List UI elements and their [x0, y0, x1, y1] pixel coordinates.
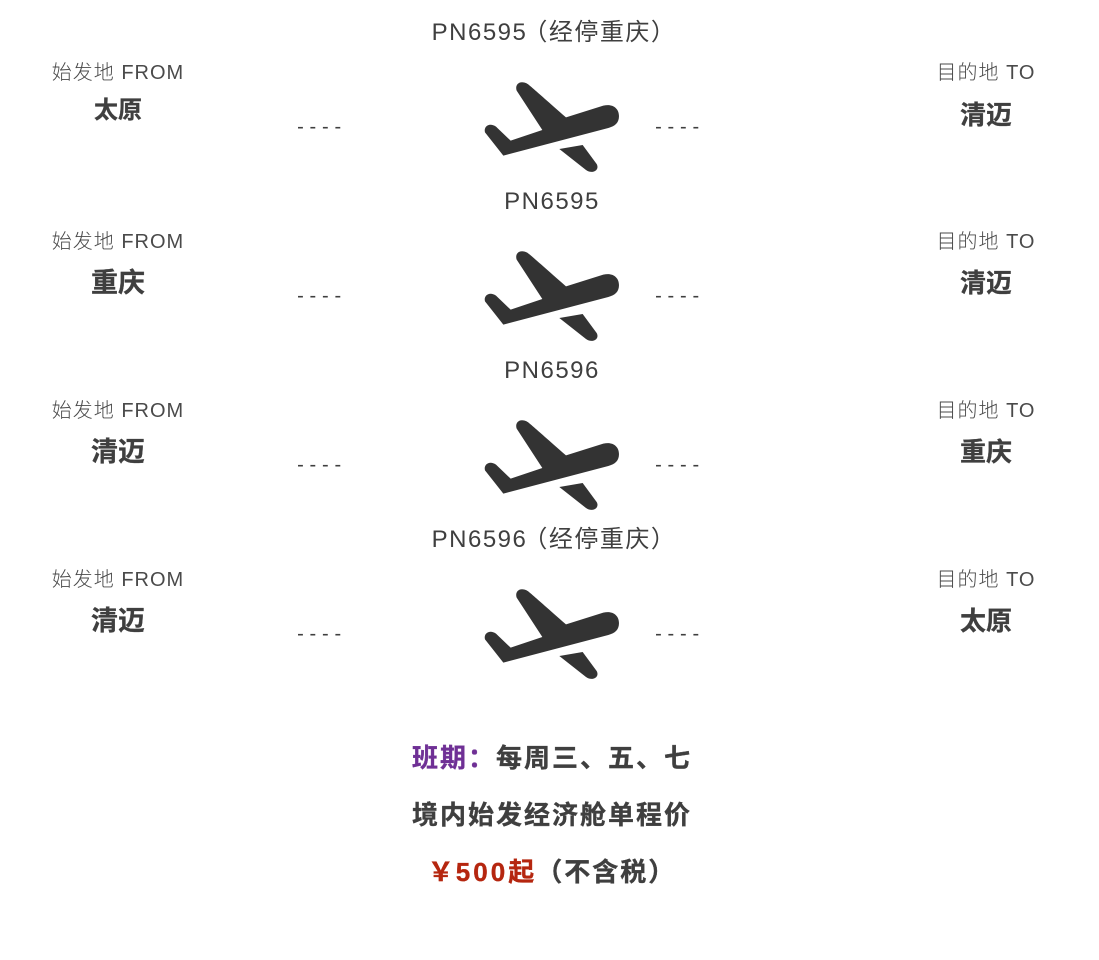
destination city: 太原 [960, 606, 1012, 636]
left dashes: ---- [297, 623, 347, 645]
destination city: 清迈 [960, 100, 1012, 130]
flight number: PN6595 [504, 188, 600, 215]
right dashes: ---- [655, 454, 705, 476]
flight number: PN6596（经停重庆） [432, 526, 676, 553]
right dashes: ---- [655, 285, 705, 307]
destination label: 目的地 TO [937, 569, 1035, 591]
price line: ￥500起（不含税） [428, 857, 676, 887]
icon: airplane [484, 251, 619, 341]
right dashes: ---- [655, 116, 705, 138]
origin city: 重庆 [91, 268, 145, 298]
flight row 1: Taiyuan to Chiang Mai [52, 19, 1035, 172]
schedule line: 班期：每周三、五、七 [412, 743, 692, 773]
icon: airplane [484, 420, 619, 510]
origin city: 太原 [94, 97, 142, 124]
left dashes: ---- [297, 454, 347, 476]
origin label: 始发地 FROM [52, 400, 184, 422]
destination city: 重庆 [960, 437, 1012, 467]
destination city: 清迈 [960, 268, 1012, 298]
fare description line: 境内始发经济舱单程价 [412, 800, 692, 830]
origin city: 清迈 [91, 606, 145, 636]
flight row 3: Chiang Mai to Chongqing [52, 357, 1035, 510]
icon: airplane [484, 82, 619, 172]
flight row 4: Chiang Mai to Taiyuan [52, 526, 1035, 679]
destination label: 目的地 TO [937, 62, 1035, 84]
flight row 2: Chongqing to Chiang Mai [52, 188, 1035, 341]
origin city: 清迈 [91, 437, 145, 467]
left dashes: ---- [297, 116, 347, 138]
flight number: PN6596 [504, 357, 600, 384]
origin label: 始发地 FROM [52, 62, 184, 84]
left dashes: ---- [297, 285, 347, 307]
flight number: PN6595（经停重庆） [432, 19, 676, 46]
destination label: 目的地 TO [937, 400, 1035, 422]
right dashes: ---- [655, 623, 705, 645]
origin label: 始发地 FROM [52, 569, 184, 591]
destination label: 目的地 TO [937, 231, 1035, 253]
icon: airplane [484, 589, 619, 679]
origin label: 始发地 FROM [52, 231, 184, 253]
